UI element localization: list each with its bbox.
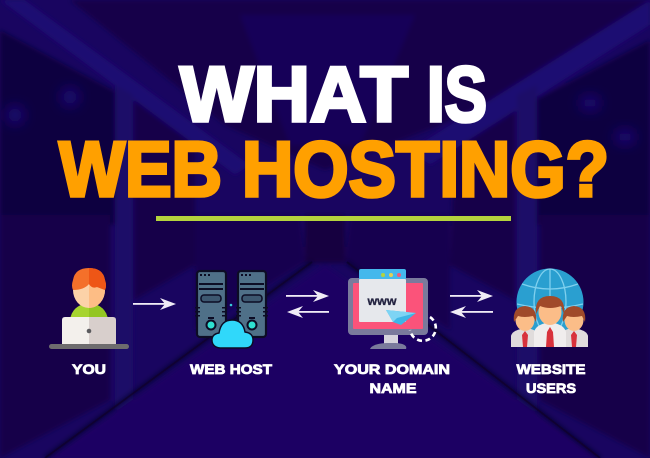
label: your domain name: YOUR DOMAIN bbox=[334, 361, 450, 377]
title line 2 bbox=[59, 125, 609, 213]
arrow: you to web host bbox=[133, 298, 176, 310]
title line 1: IS bbox=[427, 50, 487, 138]
label: your domain name: NAME bbox=[370, 380, 416, 396]
arrows: web host and domain bbox=[286, 290, 329, 318]
title line 1: WHAT bbox=[180, 50, 408, 138]
divider underline bbox=[156, 216, 511, 221]
arrows: domain and users bbox=[450, 290, 493, 318]
label: website users: USERS bbox=[526, 380, 576, 396]
label: your domain name bbox=[334, 361, 450, 396]
icon: person at laptop bbox=[49, 268, 129, 349]
title line 2: HOSTING? bbox=[242, 125, 609, 213]
label: web host: WEB HOST bbox=[190, 361, 272, 377]
title line 2: WEB bbox=[59, 125, 222, 213]
icon: website users with globe bbox=[511, 268, 588, 347]
label: website users bbox=[516, 361, 586, 396]
label: website users: WEBSITE bbox=[516, 361, 586, 377]
icon: domain name monitor bbox=[348, 269, 436, 349]
icon: domain name monitor: www bbox=[366, 294, 397, 308]
icon: web host servers with cloud bbox=[195, 271, 268, 348]
label: you: YOU bbox=[72, 361, 106, 377]
